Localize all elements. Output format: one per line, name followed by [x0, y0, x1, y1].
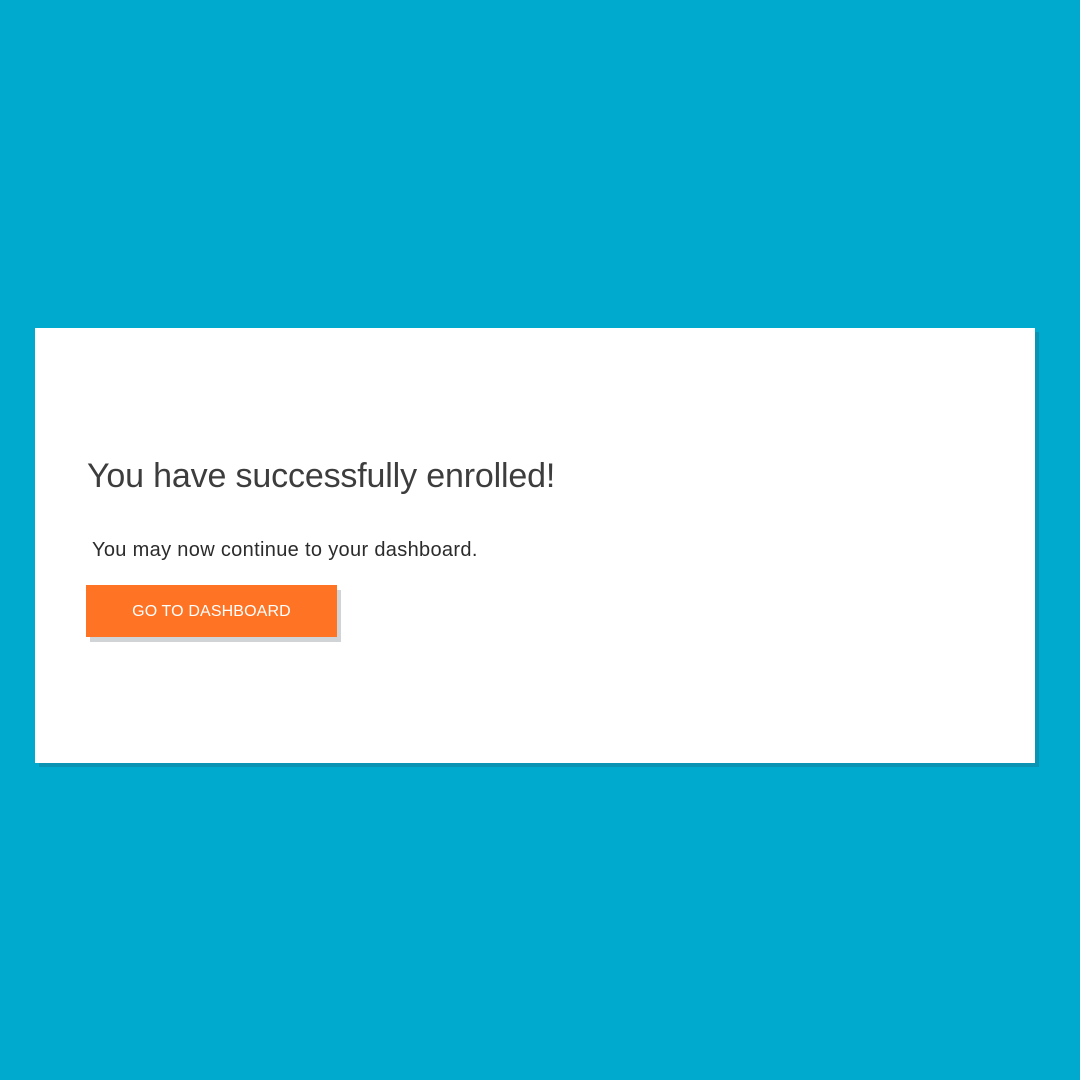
button: go to dashboard	[86, 585, 337, 637]
panel: enrollment confirmation card	[35, 328, 1035, 763]
button: go to dashboard: GO TO DASHBOARD	[132, 603, 291, 620]
text block: dashboard instruction: You may now continue to your dashboard.	[92, 539, 478, 561]
heading: success message: You have successfully enrolled!	[87, 457, 555, 495]
